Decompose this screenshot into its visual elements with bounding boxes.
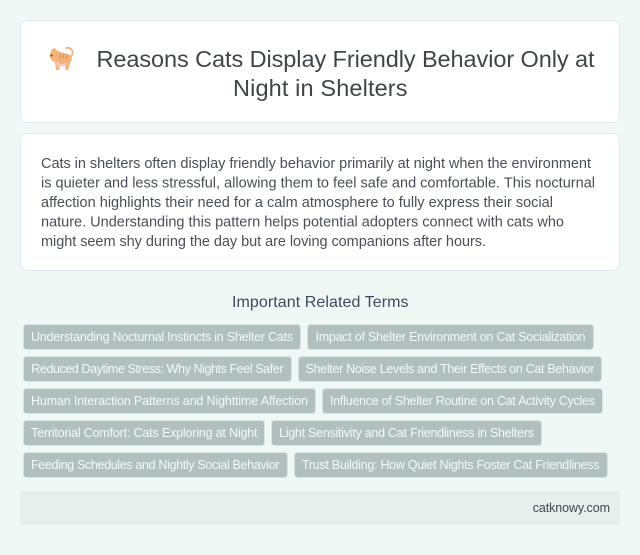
heading: important related terms: Important Related Terms bbox=[232, 294, 408, 311]
panel: title card bbox=[20, 20, 620, 122]
tag bbox=[294, 452, 608, 478]
tag list bbox=[24, 324, 608, 478]
heading: Reasons Cats Display Friendly Behavior Only at bbox=[96, 46, 595, 72]
tag bbox=[272, 420, 542, 446]
panel: description bbox=[20, 134, 620, 270]
tag bbox=[298, 356, 602, 382]
tag: Feeding Schedules and Nightly Social Behavior bbox=[31, 458, 280, 472]
tag bbox=[322, 388, 602, 414]
tag: Human Interaction Patterns and Nighttime Affection bbox=[31, 394, 308, 408]
tag: Impact of Shelter Environment on Cat Socialization bbox=[316, 330, 586, 344]
footer text: catknowy.com bbox=[533, 501, 610, 515]
tag: Shelter Noise Levels and Their Effects on Cat Behavior bbox=[306, 362, 594, 376]
icon: cat bbox=[50, 48, 73, 70]
text block: description: is quieter and less stressful, allowing them to feel safe and comfortable. This nocturnal bbox=[41, 176, 595, 192]
tag: Trust Building: How Quiet Nights Foster Cat Friendliness bbox=[302, 458, 600, 472]
tag: Influence of Shelter Routine on Cat Activity Cycles bbox=[330, 394, 595, 408]
tag bbox=[24, 420, 264, 446]
text block: description: might seem shy during the day but are loving companions after hours. bbox=[41, 234, 486, 250]
tag bbox=[24, 388, 316, 414]
text block: description: nature. Understanding this pattern helps potential adopters connect with cats who bbox=[41, 214, 564, 230]
tag bbox=[24, 324, 300, 350]
tag: Understanding Nocturnal Instincts in Shelter Cats bbox=[31, 330, 293, 344]
tag bbox=[24, 356, 292, 382]
tag: Territorial Comfort: Cats Exploring at Night bbox=[31, 426, 258, 440]
tag: Light Sensitivity and Cat Friendliness in Shelters bbox=[279, 426, 534, 440]
text block: description: affection highlights their need for a calm atmosphere to fully express their social bbox=[41, 195, 553, 211]
text block: description: Cats in shelters often display friendly behavior primarily at night when the environment bbox=[41, 156, 591, 172]
tag bbox=[308, 324, 594, 350]
tag: Reduced Daytime Stress: Why Nights Feel Safer bbox=[31, 362, 283, 376]
tag bbox=[24, 452, 288, 478]
heading: Night in Shelters bbox=[233, 75, 408, 101]
footer bbox=[20, 491, 620, 525]
